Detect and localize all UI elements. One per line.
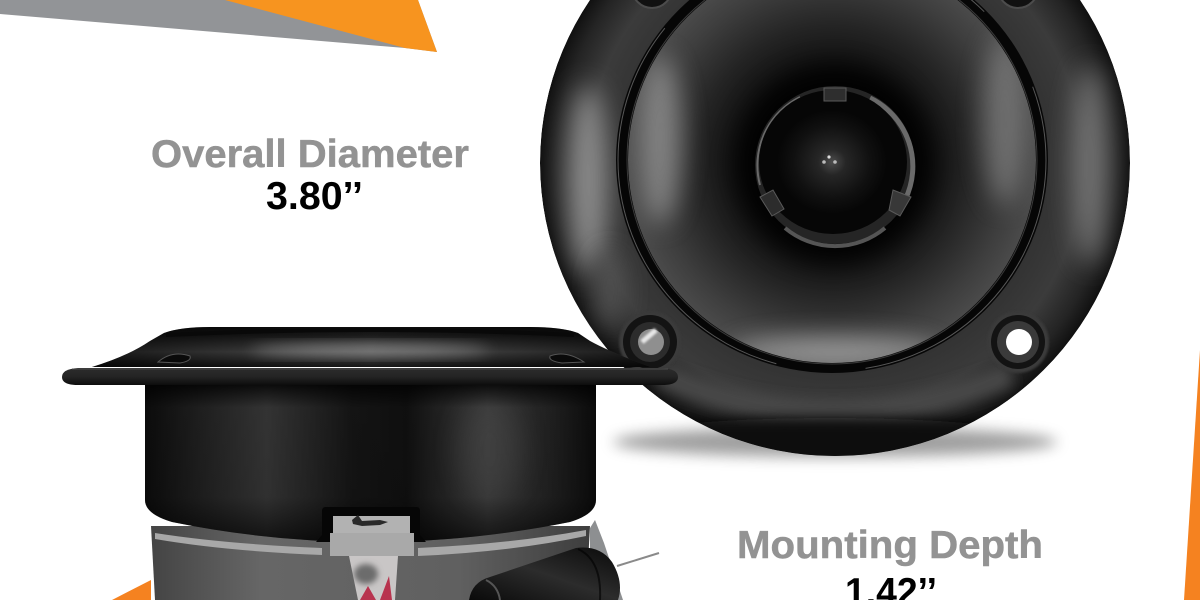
flange lip [62,368,678,385]
terminal notch and tab [316,507,426,600]
mounting hole: lower left [619,311,681,373]
label title: Overall Diameter [151,133,469,176]
flange screw dimples [158,354,584,363]
label: mounting depth [737,524,1043,600]
metal cup [145,385,596,545]
value: 3.80’’ [266,175,363,218]
cone [628,0,1036,366]
front view speaker [540,0,1130,462]
gasket ring [616,0,1048,373]
floor shadow under front speaker [613,427,1057,457]
magnet housing [151,520,623,600]
outer flange [540,0,1130,462]
silver seam [155,533,322,555]
decorative banner: bottom left [112,580,151,600]
mounting holes: top [632,0,1038,8]
mounting hole: lower right [987,311,1049,373]
side view speaker [62,327,678,600]
label title: Mounting Depth [737,524,1043,567]
tweeter dome [737,67,933,263]
decorative banner: right edge [1184,350,1200,600]
capacitor [469,548,659,600]
decorative banner: top left [0,0,437,52]
top dome [92,327,650,367]
label: overall diameter [151,133,469,218]
